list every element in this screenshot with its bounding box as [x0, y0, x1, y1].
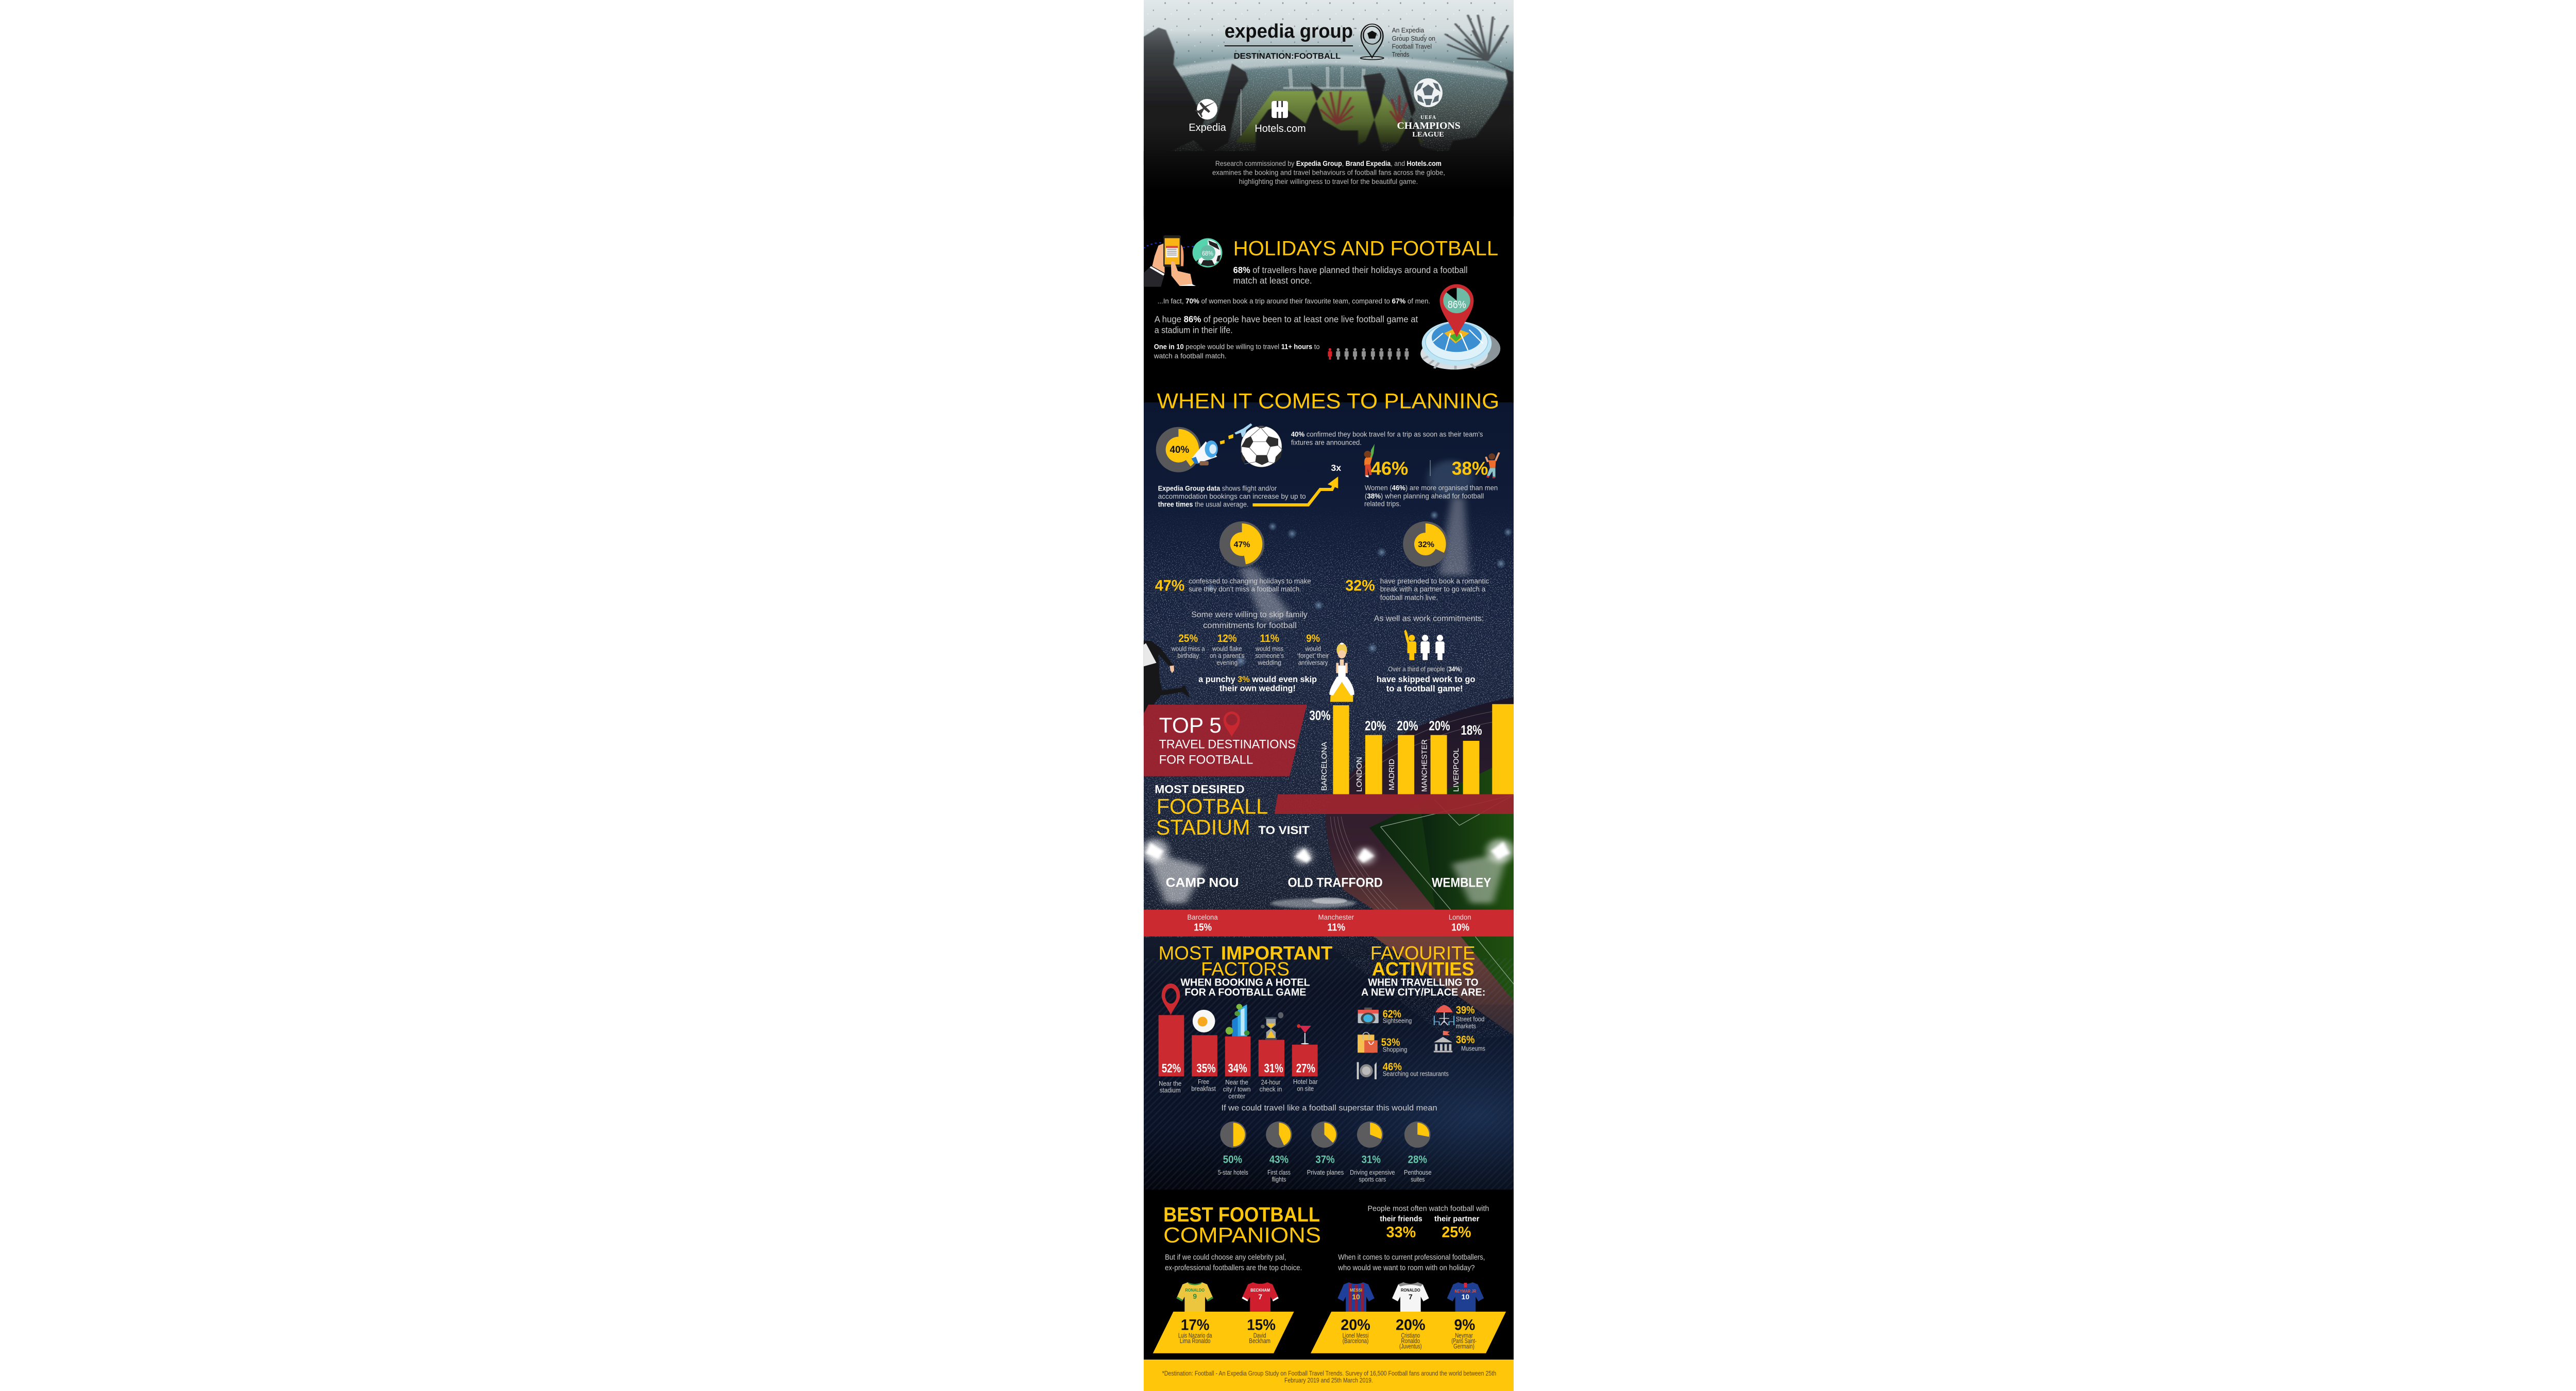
intro paragraph — [1212, 159, 1445, 185]
factor labels: Free — [1198, 1078, 1209, 1085]
label: 3x: 3x — [1331, 463, 1341, 473]
panel: most important factors — [1159, 942, 1333, 1100]
heading — [1159, 713, 1296, 767]
study description: Group Study on — [1392, 35, 1435, 42]
icon: white Ronaldo 7 jersey: RONALDO — [1401, 1287, 1420, 1293]
stats: watch football with: 33% — [1386, 1224, 1416, 1241]
bar chart: destinations: 20% — [1397, 719, 1418, 734]
expedia group logo: expedia group — [1225, 21, 1353, 42]
icon: man fan — [1486, 452, 1499, 478]
factor labels: center — [1228, 1092, 1246, 1100]
text: 68 percent of travellers: match at least once. — [1233, 276, 1312, 286]
text: current footballers: When it comes to current professional footballers, — [1338, 1253, 1485, 1262]
stats: watch football with: 25% — [1442, 1224, 1471, 1241]
icon: street food table — [1434, 1005, 1454, 1025]
background: football pitch — [1369, 757, 1514, 1001]
text: skip their own wedding — [1198, 674, 1317, 693]
text: current footballers — [1337, 1253, 1485, 1273]
red stat band — [1144, 910, 1514, 937]
stat: 25 percent birthday — [1171, 633, 1205, 659]
panel: current footballer stats: (Barcelona) — [1343, 1337, 1368, 1345]
icon: UEFA Champions League logo: UEFA — [1420, 115, 1436, 121]
text: 86 percent: A huge 86% of people have been to at least one live football game at — [1155, 314, 1418, 325]
intro paragraph: Research commissioned by Expedia Group, Brand Expedia, and Hotels.com — [1215, 159, 1442, 167]
heading: BEST FOOTBALL — [1163, 1203, 1320, 1226]
icon: fried egg — [1193, 1010, 1215, 1032]
icon: red Beckham 7 jersey: BECKHAM — [1250, 1287, 1270, 1293]
bar chart: destinations: MADRID — [1387, 759, 1396, 790]
donut chart: 32% — [1403, 521, 1448, 567]
stat: 32 percent: have pretended to book a romantic — [1380, 577, 1489, 585]
heading — [1159, 942, 1333, 998]
pie: 43 percent — [1266, 1122, 1292, 1183]
stat: restaurants: 46% — [1383, 1061, 1402, 1073]
panel: footer source note: *Destination: Football - An Expedia Group Study on Football Travel Trends. Survey of 16,500 Football fans around the world between 25th — [1162, 1370, 1496, 1377]
stat: 11 percent wedding — [1255, 633, 1284, 667]
stat: 12 percent parents evening: evening — [1216, 659, 1238, 667]
panel: current footballer stats: 9% — [1454, 1317, 1475, 1334]
heading: TOP 5 — [1159, 713, 1222, 737]
text: skipped work: to a football game! — [1386, 684, 1463, 693]
factor labels: check in — [1260, 1085, 1282, 1093]
text: skipped work: have skipped work to go — [1377, 674, 1475, 684]
icon: stadium pin — [1162, 983, 1180, 1015]
icon: Expedia logo — [1189, 99, 1227, 133]
intro paragraph: highlighting their willingness to travel for the beautiful game. — [1239, 177, 1418, 185]
icon: megaphone and plane — [1191, 423, 1252, 465]
pie: 28 percent: suites — [1411, 1176, 1425, 1183]
heading: WHEN IT COMES TO PLANNING — [1157, 389, 1499, 413]
red band — [1275, 794, 1514, 814]
bar chart: hotel factors — [1159, 1015, 1318, 1076]
text: skipped work — [1377, 666, 1475, 693]
panel: top 5 travel destinations — [1144, 704, 1514, 794]
panel: travel like a football superstar — [1218, 1104, 1437, 1183]
icon: Hotels.com logo — [1255, 101, 1306, 134]
heading: WHEN BOOKING A HOTEL — [1180, 977, 1310, 988]
stat: 47 percent — [1155, 577, 1311, 595]
panel: when it comes to planning — [1141, 389, 1499, 726]
heading: FACTORS — [1201, 958, 1290, 979]
text: 86 percent — [1155, 314, 1418, 335]
text: one in 10 — [1154, 343, 1320, 360]
icon: football — [1241, 426, 1282, 467]
text: women vs men organised: Women (46%) are more organised than men — [1365, 484, 1498, 492]
bar chart: destinations: LONDON — [1355, 757, 1364, 792]
stat: 9 percent anniversary: ‘forget’ their — [1297, 652, 1329, 659]
icon: stadium with 86 percent pin — [1420, 284, 1500, 369]
bar chart: destinations: 20% — [1429, 719, 1450, 734]
stat: 32 percent — [1345, 577, 1489, 601]
icon: floodlights — [1141, 839, 1514, 908]
stat: museums — [1456, 1034, 1485, 1052]
stat: restaurants — [1383, 1061, 1449, 1078]
stat: 9 percent anniversary — [1297, 633, 1329, 667]
icon: red pin — [1224, 711, 1240, 737]
stat: 47 percent: 47% — [1155, 578, 1184, 595]
expedia group logo: ™ — [1353, 27, 1357, 31]
panel: current footballer stats: 20% — [1341, 1317, 1370, 1334]
icon: cocktail — [1297, 1024, 1311, 1044]
panel: ex-professional footballer stats: Lima Ronaldo — [1180, 1337, 1210, 1345]
panel: ex-professional footballer stats: David — [1253, 1332, 1266, 1339]
heading — [1163, 1203, 1321, 1247]
icon: Neymar 10 jersey: NEYMAR JR — [1455, 1289, 1476, 1294]
icon: red Beckham 7 jersey: 7 — [1258, 1293, 1262, 1301]
heading: MOST DESIRED — [1155, 783, 1245, 795]
panel: current footballer stats: (Juventus) — [1399, 1342, 1422, 1350]
icon: shopping bags — [1358, 1032, 1378, 1053]
stat: 25 percent birthday: birthday — [1177, 652, 1199, 659]
bar chart: hotel factors: 27% — [1296, 1062, 1315, 1076]
text: skip family commitments: Some were willing to skip family — [1191, 610, 1308, 619]
panel: favourite activities — [1357, 942, 1485, 1079]
stat: 12 percent parents evening: on a parent’s — [1210, 652, 1245, 659]
stat: 9 percent anniversary: anniversary — [1298, 659, 1328, 667]
text: celebrity pal: ex-professional footballers are the top choice. — [1165, 1264, 1302, 1273]
icon: Neymar 10 jersey — [1447, 1282, 1484, 1312]
icon row: three workers — [1404, 630, 1445, 660]
heading — [1361, 942, 1485, 998]
stat: 47 percent: sure they don’t miss a football match. — [1189, 585, 1301, 593]
heading: FOR A FOOTBALL GAME — [1184, 987, 1306, 998]
stat: 32 percent: 32% — [1345, 578, 1375, 595]
stat: sightseeing: Sightseeing — [1383, 1016, 1412, 1025]
panel: current footballer stats: 20% — [1396, 1317, 1426, 1334]
heading: TO VISIT — [1258, 824, 1310, 837]
panel: ex-professional footballer stats: Luis Nazario da — [1178, 1332, 1212, 1339]
study description: Trends — [1392, 50, 1409, 58]
panel: current footballer stats — [1311, 1312, 1506, 1353]
bar chart: destinations: 20% — [1365, 719, 1386, 734]
factor labels: Near the — [1225, 1078, 1248, 1086]
text: 40 percent confirmed: 40% confirmed they book travel for a trip as soon as their team’s — [1291, 430, 1483, 438]
stat: street food: Street food — [1456, 1015, 1484, 1023]
bar chart: destinations: BARCELONA — [1320, 742, 1329, 791]
bar chart: hotel factors: 52% — [1162, 1062, 1181, 1076]
bar chart: hotel factors: 35% — [1196, 1062, 1216, 1076]
text: 86 percent: a stadium in their life. — [1155, 325, 1233, 335]
icon: running groom — [1141, 640, 1190, 726]
heading: A NEW CITY/PLACE ARE: — [1361, 987, 1485, 998]
heading — [1155, 783, 1310, 839]
stat: 12 percent parents evening: would flake — [1212, 645, 1242, 652]
pie: 31 percent: 31% — [1362, 1154, 1381, 1166]
icon: UEFA Champions League logo: LEAGUE — [1412, 131, 1444, 139]
pie: 43 percent: flights — [1272, 1176, 1286, 1183]
factor labels: 24-hour — [1261, 1078, 1281, 1086]
panel: current footballer stats: Cristiano — [1401, 1332, 1420, 1339]
red banner — [1144, 705, 1307, 776]
stat: 11 percent wedding: wedding — [1257, 659, 1281, 667]
pie: 31 percent: Driving expensive — [1350, 1168, 1395, 1176]
stat: museums: 36% — [1456, 1034, 1475, 1046]
stat: 47 percent: confessed to changing holidays to make — [1189, 577, 1311, 585]
header photo background — [1143, 0, 1514, 220]
bar chart: destinations: MANCHESTER — [1420, 739, 1429, 792]
text: skip family commitments — [1191, 610, 1308, 630]
stats: watch football with: their partner — [1434, 1215, 1480, 1224]
icon: Neymar 10 jersey: 10 — [1462, 1293, 1469, 1301]
panel: stadium header — [1143, 0, 1514, 220]
pie: 37 percent: Private planes — [1307, 1168, 1344, 1176]
heading: MOST — [1159, 942, 1213, 963]
panel: holidays and football — [1143, 206, 1514, 403]
text: Expedia Group data — [1158, 484, 1306, 508]
label: Wembley: WEMBLEY — [1432, 876, 1492, 890]
red stat band: Manchester — [1318, 913, 1354, 921]
stat: restaurants: Searching out restaurants — [1383, 1070, 1449, 1078]
text: one in 10: One in 10 people would be willing to travel 11+ hours to — [1154, 343, 1320, 351]
text: Expedia Group data: Expedia Group data shows flight and/or — [1158, 484, 1277, 492]
text: celebrity pal: But if we could choose any celebrity pal, — [1165, 1253, 1286, 1262]
donut chart: 47%: 47% — [1234, 540, 1250, 549]
panel: most desired football stadium — [1141, 783, 1514, 937]
text: skip their own wedding: their own wedding! — [1219, 684, 1296, 693]
icon: camera — [1358, 1008, 1379, 1024]
icon: white Ronaldo 7 jersey: 7 — [1409, 1293, 1413, 1301]
text: 40 percent confirmed: fixtures are announced. — [1291, 438, 1362, 446]
panel: current footballer stats: Lionel Messi — [1343, 1332, 1368, 1339]
text: women vs men organised: related trips. — [1364, 500, 1401, 508]
pie: 28 percent — [1404, 1122, 1432, 1183]
heading: IMPORTANT — [1221, 942, 1333, 963]
icon: red Beckham 7 jersey — [1242, 1282, 1279, 1312]
stat: 11 percent wedding: 11% — [1260, 633, 1279, 644]
label: Camp Nou: CAMP NOU — [1166, 876, 1239, 890]
text: celebrity pal — [1165, 1253, 1302, 1273]
intro paragraph: examines the booking and travel behaviours of football fans across the globe, — [1212, 168, 1445, 176]
stat: 25 percent birthday: 25% — [1178, 633, 1198, 644]
factor labels: city / town — [1223, 1085, 1250, 1093]
pie: 50 percent — [1218, 1122, 1248, 1176]
text: skip family commitments: commitments for football — [1203, 621, 1297, 630]
pie: 50 percent: 5-star hotels — [1218, 1168, 1248, 1176]
icon: museum — [1434, 1031, 1452, 1053]
label: Old Trafford: OLD TRAFFORD — [1287, 876, 1383, 890]
red stat band: 15% — [1194, 922, 1212, 934]
red stat band: 11% — [1327, 922, 1345, 934]
heading: FAVOURITE — [1370, 942, 1475, 963]
heading: TRAVEL DESTINATIONS — [1159, 738, 1296, 752]
icon: UEFA Champions League logo: CHAMPIONS — [1397, 121, 1461, 131]
text: 68 percent of travellers — [1233, 265, 1468, 286]
text: work commitments: As well as work commitments: — [1374, 615, 1484, 623]
icon: white Ronaldo 7 jersey — [1392, 1282, 1429, 1312]
icon: bride — [1329, 643, 1354, 702]
pie: 28 percent: 28% — [1408, 1154, 1427, 1166]
pie: 43 percent: 43% — [1269, 1154, 1289, 1166]
background: carbon texture — [1144, 958, 1514, 1190]
text: Expedia Group data: accommodation bookings can increase by up to — [1158, 492, 1306, 500]
panel: ex-professional footballer stats: Beckham — [1249, 1337, 1270, 1345]
pie: 31 percent: sports cars — [1359, 1176, 1386, 1183]
heading: If we could travel like a football superstar this would mean — [1222, 1104, 1437, 1113]
text: current footballers: who would we want to room with on holiday? — [1337, 1264, 1475, 1273]
stat: 12 percent parents evening — [1210, 633, 1245, 667]
stat: 12 percent parents evening: 12% — [1217, 633, 1237, 644]
bar chart: destinations — [1309, 704, 1514, 794]
icon: UEFA Champions League logo — [1397, 78, 1461, 139]
pie: 50 percent: 50% — [1223, 1154, 1242, 1166]
panel: planning background — [1144, 402, 1514, 1190]
stat: 11 percent wedding: would miss — [1256, 645, 1283, 652]
expedia group logo — [1224, 24, 1356, 59]
panel: ex-professional footballer stats: 15% — [1247, 1317, 1276, 1334]
factor labels: breakfast — [1191, 1084, 1216, 1092]
panel: ex-professional footballer stats: 17% — [1181, 1317, 1209, 1334]
bar chart: destinations: 30% — [1309, 709, 1331, 723]
arrow: growth — [1252, 477, 1338, 505]
donut chart: 40% — [1156, 427, 1201, 472]
text: one in 10: watch a football match. — [1154, 352, 1227, 360]
icon: hourglass — [1261, 1012, 1283, 1040]
text: 40 percent confirmed — [1291, 430, 1483, 446]
stats: watch football with: their friends — [1380, 1215, 1422, 1224]
text: 68 percent of travellers: 68% of travellers have planned their holidays around a football — [1233, 265, 1468, 275]
icon: Messi 10 jersey: MESSI — [1350, 1287, 1362, 1293]
text: skip their own wedding: a punchy 3% would even skip — [1198, 674, 1317, 684]
text: women vs men organised: (38%) when planning ahead for football — [1365, 491, 1484, 500]
icon: Messi 10 jersey: 10 — [1352, 1293, 1360, 1301]
text: Expedia Group data: three times the usual average. — [1158, 500, 1248, 508]
stat: street food: markets — [1456, 1022, 1476, 1030]
factor labels: on site — [1297, 1085, 1314, 1093]
panel: current footballer stats: (Paris Saint- — [1451, 1337, 1477, 1345]
donut chart: 32%: 32% — [1418, 540, 1434, 549]
panel: footer source note: February 2019 and 25th March 2019. — [1284, 1377, 1373, 1384]
stat: 11 percent wedding: someone’s — [1255, 652, 1284, 659]
heading: HOLIDAYS AND FOOTBALL — [1233, 238, 1498, 260]
stat: 32 percent: football match live. — [1380, 593, 1438, 601]
heading: FOOTBALL — [1157, 794, 1268, 818]
stat: museums: Museums — [1461, 1044, 1485, 1052]
heading: STADIUM — [1156, 815, 1250, 839]
stat: sightseeing — [1383, 1008, 1412, 1025]
icon: city building — [1226, 1004, 1249, 1037]
donut chart: 40%: 40% — [1170, 445, 1189, 455]
stat: 9 percent anniversary: 9% — [1306, 633, 1320, 644]
icon row: one in ten people — [1328, 348, 1409, 360]
expedia group logo: DESTINATION:FOOTBALL — [1234, 52, 1341, 61]
red stat band: 10% — [1451, 922, 1469, 934]
icon: Hotels.com logo: Hotels.com — [1255, 123, 1306, 134]
panel: current footballer stats: Germain) — [1453, 1342, 1475, 1350]
icon: yellow Ronaldo 9 jersey — [1176, 1282, 1213, 1312]
heading: COMPANIONS — [1163, 1223, 1321, 1247]
panel: ex-professional footballer stats — [1153, 1312, 1294, 1353]
factor labels: Near the — [1159, 1079, 1181, 1087]
background: running track — [1325, 697, 1514, 1036]
icon: stadium with 86 percent pin: 86% — [1448, 299, 1466, 311]
icon: hand holding phone with calendar — [1143, 235, 1196, 287]
study description: An Expedia — [1392, 26, 1425, 34]
icon: woman fan — [1364, 444, 1375, 478]
study description — [1392, 26, 1435, 58]
icon: Messi 10 jersey — [1337, 1282, 1375, 1312]
stat: shopping: 53% — [1381, 1037, 1400, 1048]
icon: football donut 68%: 68% — [1202, 249, 1213, 257]
donut chart: 47% — [1219, 521, 1264, 567]
bar chart: hotel factors: 31% — [1264, 1062, 1283, 1076]
icon: plate and cutlery — [1357, 1062, 1377, 1079]
big stat 38 percent: 38% — [1452, 459, 1488, 479]
pie: 43 percent: First class — [1267, 1168, 1291, 1176]
heading: FOR FOOTBALL — [1159, 753, 1253, 767]
stat: street food — [1456, 1005, 1484, 1030]
bar chart: destinations: 18% — [1461, 723, 1482, 738]
heading: WHEN TRAVELLING TO — [1368, 977, 1479, 988]
stat: sightseeing: 62% — [1383, 1008, 1401, 1020]
bar chart: hotel factors: 34% — [1228, 1062, 1247, 1076]
panel: footer source note — [1144, 1360, 1514, 1391]
panel: current footballer stats: Neymar — [1455, 1332, 1473, 1339]
stat: 32 percent: break with a partner to go watch a — [1380, 585, 1486, 593]
study description: Football Travel — [1392, 43, 1432, 50]
factor labels — [1159, 1078, 1318, 1100]
big stat 46 percent: 46% — [1371, 459, 1408, 479]
icon: football donut 68% — [1193, 238, 1222, 267]
factor labels: Hotel bar — [1293, 1078, 1318, 1085]
panel: best football companions — [1144, 1190, 1514, 1360]
pie: 37 percent — [1307, 1122, 1344, 1176]
pie: 31 percent — [1350, 1122, 1395, 1183]
text: skipped work: Over a third of people (34%) — [1388, 666, 1462, 673]
stat: shopping — [1381, 1037, 1407, 1054]
factor labels: stadium — [1160, 1087, 1181, 1094]
stats: watch football with: People most often watch football with — [1368, 1205, 1489, 1213]
heading: ACTIVITIES — [1372, 958, 1474, 979]
stat: 9 percent anniversary: would — [1304, 645, 1321, 652]
bar chart: destinations: LIVERPOOL — [1452, 748, 1461, 792]
panel: current footballer stats: Ronaldo — [1401, 1337, 1420, 1345]
pie: 37 percent: 37% — [1315, 1154, 1335, 1166]
stats: watch football with — [1368, 1205, 1489, 1241]
red stat band: London — [1449, 913, 1471, 921]
stat: 25 percent birthday: would miss a — [1171, 645, 1205, 652]
icon: football location pin — [1361, 24, 1383, 60]
pie: 28 percent: Penthouse — [1404, 1168, 1432, 1176]
text: women vs men: ...In fact, 70% of women book a trip around their favourite team, compared to 67% of men. — [1158, 297, 1430, 305]
red stat band: Barcelona — [1188, 913, 1218, 921]
icon: Expedia logo: Expedia — [1189, 122, 1227, 133]
text: women vs men organised — [1364, 484, 1498, 508]
stat: shopping: Shopping — [1383, 1046, 1407, 1054]
icon: yellow Ronaldo 9 jersey: 9 — [1193, 1292, 1197, 1300]
stat: street food: 39% — [1456, 1005, 1475, 1016]
icon: yellow Ronaldo 9 jersey: RONALDO — [1185, 1287, 1205, 1293]
